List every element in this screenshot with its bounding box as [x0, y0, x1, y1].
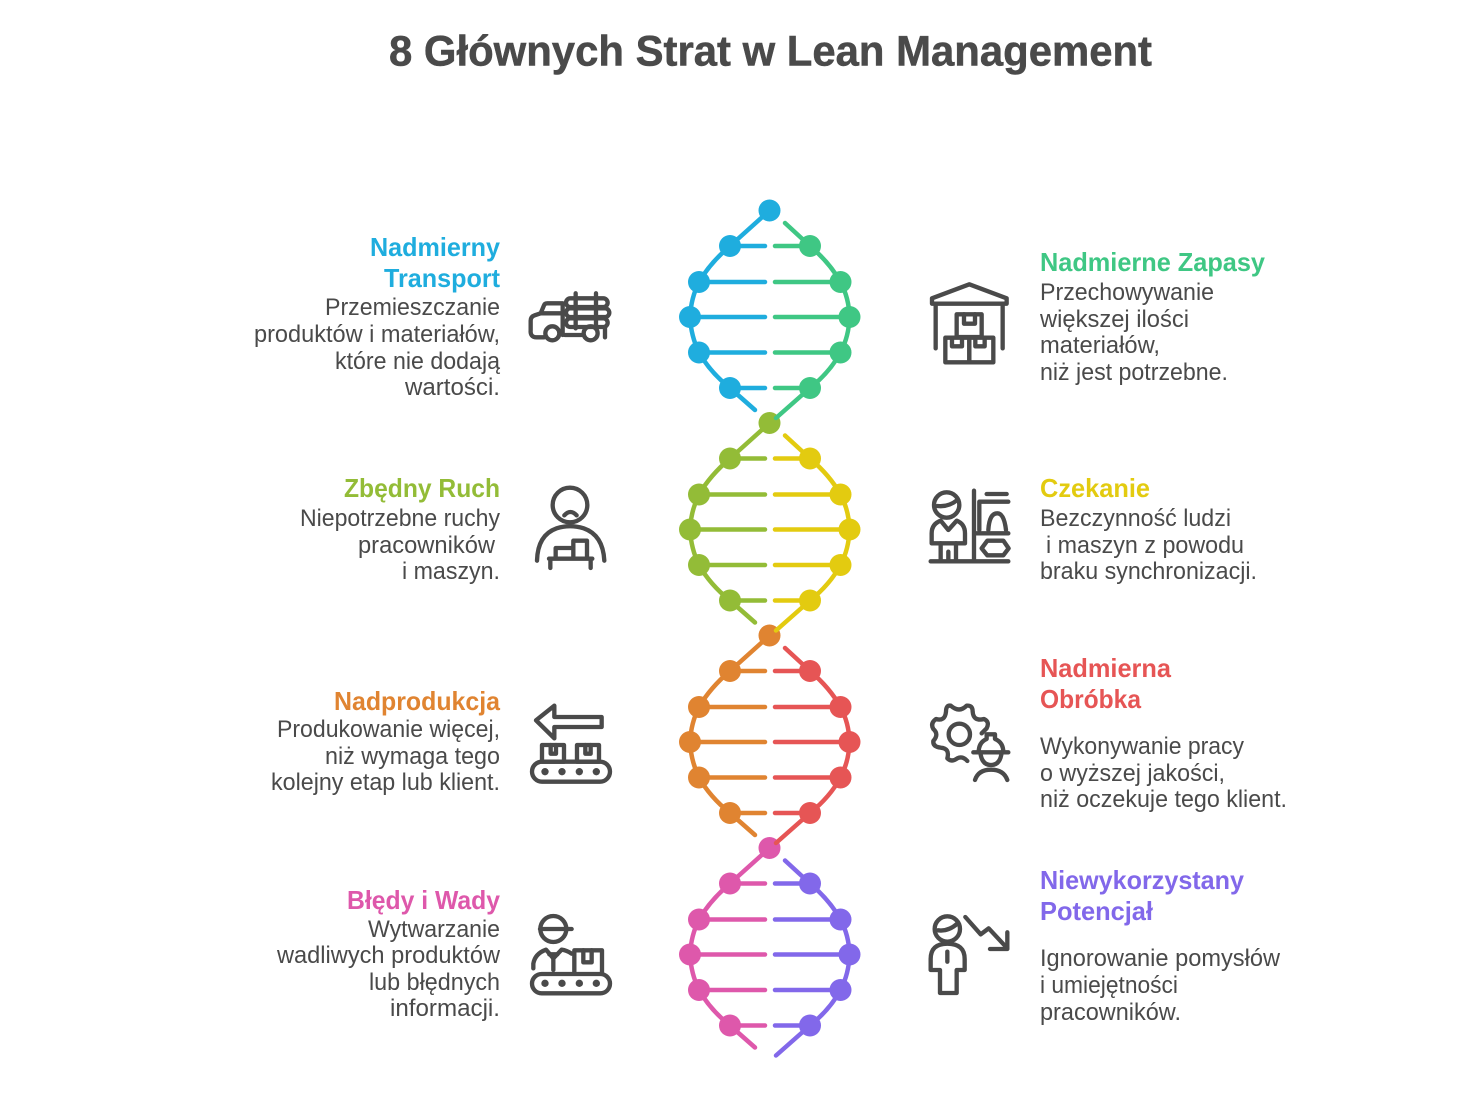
- text block: Nadmierne Zapasy: Przechowywanie: [1040, 279, 1214, 306]
- helix segment 4: pink and purple: [679, 837, 860, 1056]
- text block: Niewykorzystany Potencjał: [1040, 865, 1281, 1026]
- text block: Czekanie: Bezczynność ludzi: [1040, 505, 1231, 532]
- text block: Zbędny Ruch: pracowników: [358, 532, 496, 559]
- text block: Nadmierny Transport: które nie dodają: [335, 348, 501, 375]
- text block: Zbędny Ruch: i maszyn.: [402, 558, 500, 585]
- helix segment 3: orange and red: [679, 624, 860, 843]
- text block: Czekanie: i maszyn z powodu: [1046, 532, 1244, 559]
- text block: Nadmierna Obróbka: niż oczekuje tego klient.: [1040, 786, 1287, 813]
- text block: Błędy i Wady: informacji.: [390, 995, 500, 1022]
- text block: Błędy i Wady: wadliwych produktów: [276, 942, 501, 969]
- helix segment 1: blue and green: [679, 200, 860, 418]
- helix segment 2: olive and yellow: [679, 412, 860, 630]
- text block: Niewykorzystany Potencjał: Ignorowanie pomysłów: [1040, 945, 1281, 972]
- text block: Czekanie: braku synchronizacji.: [1040, 558, 1257, 585]
- icon: warehouse: [932, 284, 1007, 362]
- text block: Nadmierny Transport: wartości.: [404, 374, 500, 401]
- text block: Nadmierna Obróbka: Obróbka: [1040, 684, 1141, 714]
- text block: Nadmierne Zapasy: niż jest potrzebne.: [1040, 359, 1228, 386]
- text block: Nadprodukcja: Nadprodukcja: [334, 686, 501, 716]
- text block: Nadmierny Transport: Nadmierny: [370, 232, 501, 262]
- text block: Nadmierne Zapasy: materiałów,: [1040, 332, 1160, 359]
- text block: Nadmierny Transport: [254, 232, 501, 401]
- text block: Nadmierne Zapasy: [1039, 247, 1266, 386]
- text block: Niewykorzystany Potencjał: Potencjał: [1040, 896, 1154, 926]
- text block: Błędy i Wady: lub błędnych: [369, 969, 500, 996]
- text block: Niewykorzystany Potencjał: pracowników.: [1040, 999, 1181, 1026]
- text block: Nadmierny Transport: Transport: [384, 263, 500, 293]
- text block: Zbędny Ruch: [300, 473, 500, 585]
- DNA helix: [679, 200, 860, 1056]
- text block: Nadprodukcja: kolejny etap lub klient.: [271, 769, 500, 796]
- icon: person at desk: [537, 488, 604, 568]
- icon: inspector at conveyor: [532, 916, 610, 993]
- icon: person with falling arrow: [931, 916, 1007, 993]
- text block: Nadprodukcja: Produkowanie więcej,: [277, 716, 500, 743]
- title: 8 Głównych Strat w Lean Management: [389, 28, 1152, 76]
- text block: Nadmierna Obróbka: Nadmierna: [1040, 653, 1172, 683]
- text block: Błędy i Wady: Wytwarzanie: [368, 916, 500, 943]
- text block: Nadmierny Transport: Przemieszczanie: [325, 294, 500, 321]
- text block: Błędy i Wady: Błędy i Wady: [347, 885, 501, 915]
- text block: Nadmierna Obróbka: o wyższej jakości,: [1040, 760, 1225, 787]
- text block: Nadmierne Zapasy: większej ilości: [1039, 306, 1189, 333]
- text block: Niewykorzystany Potencjał: Niewykorzystany: [1040, 865, 1245, 895]
- text block: Nadmierny Transport: produktów i materiałów,: [254, 321, 500, 348]
- text block: Czekanie: [1040, 473, 1257, 585]
- text block: Nadmierna Obróbka: Wykonywanie pracy: [1040, 733, 1244, 760]
- text block: Nadmierna Obróbka: [1040, 653, 1287, 813]
- text block: Czekanie: Czekanie: [1040, 473, 1150, 503]
- text block: Nadprodukcja: [271, 686, 501, 796]
- icon: conveyor with arrow: [532, 706, 610, 782]
- icon: truck: [531, 293, 609, 340]
- text block: Zbędny Ruch: Niepotrzebne ruchy: [300, 505, 500, 532]
- text block: Nadmierne Zapasy: Nadmierne Zapasy: [1040, 247, 1266, 277]
- text block: Nadprodukcja: niż wymaga tego: [325, 743, 500, 770]
- text block: Zbędny Ruch: Zbędny Ruch: [344, 473, 500, 503]
- icon: gear and worker: [932, 706, 1008, 780]
- icon: waiting worker and machine: [931, 491, 1009, 561]
- text block: Niewykorzystany Potencjał: i umiejętności: [1040, 972, 1178, 999]
- text block: Błędy i Wady: [276, 885, 501, 1022]
